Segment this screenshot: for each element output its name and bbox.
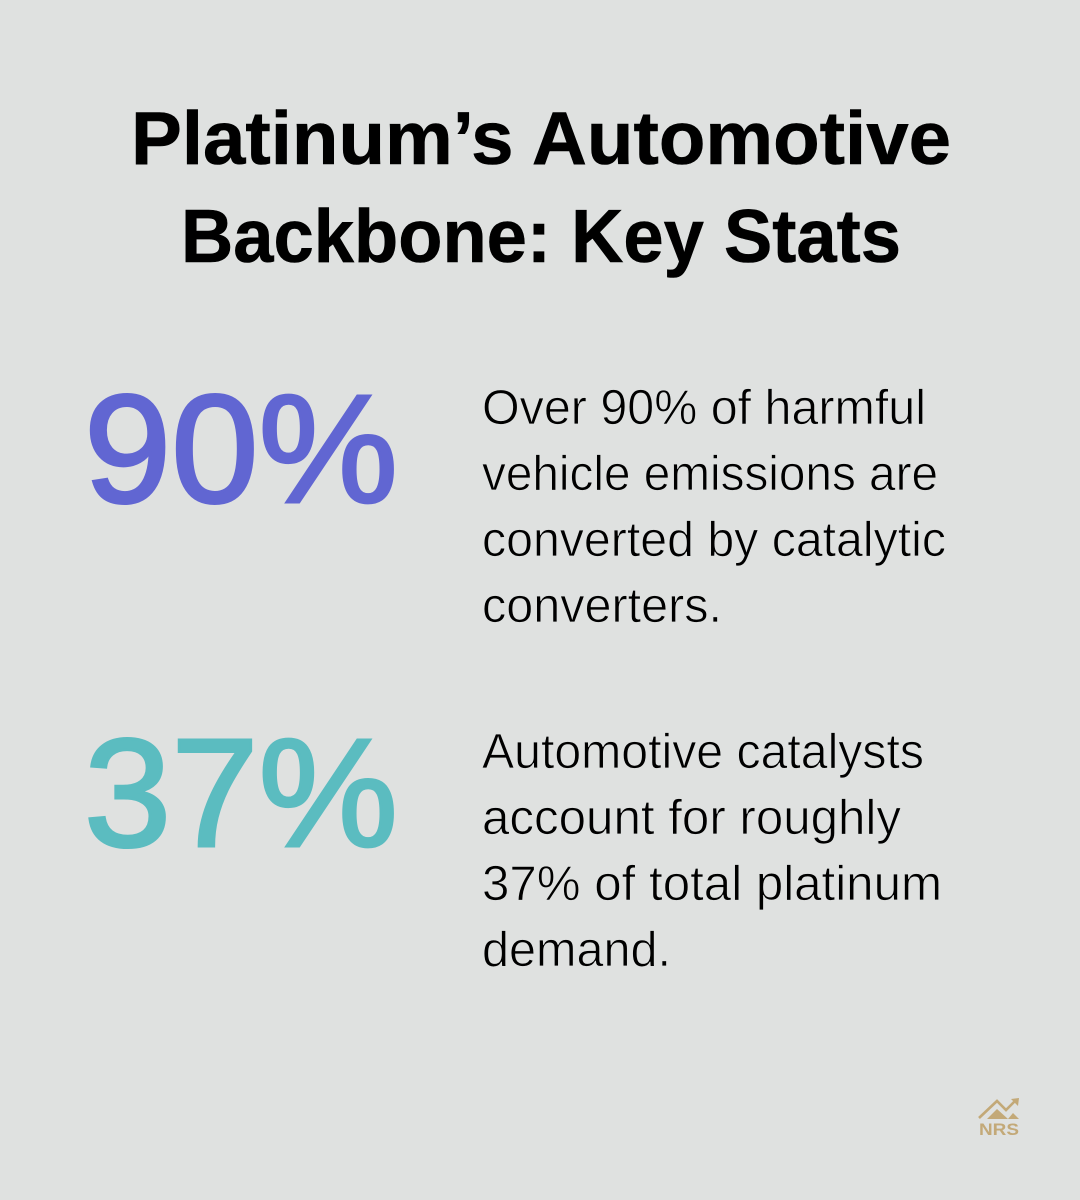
description: 37% stat: Automotive catalysts [482,725,924,779]
description: 37% stat: demand. [482,923,671,977]
icon: NRS logo [979,1098,1019,1139]
description: 90% stat [482,381,946,633]
title [131,96,951,278]
stat: 37%: 37% [84,707,398,879]
description: 90% stat: converters. [482,579,722,633]
description: 90% stat: converted by catalytic [482,513,946,567]
description: 37% stat: account for roughly [482,791,901,845]
stat: 90%: 90% [84,363,398,535]
description: 90% stat: Over 90% of harmful [482,381,926,435]
title: Backbone: Key Stats [181,194,901,278]
description: 37% stat [482,725,942,977]
icon: NRS logo: NRS [979,1121,1019,1139]
description: 90% stat: vehicle emissions are [482,447,938,501]
title: Platinum’s Automotive [131,96,951,180]
description: 37% stat: 37% of total platinum [482,857,942,911]
